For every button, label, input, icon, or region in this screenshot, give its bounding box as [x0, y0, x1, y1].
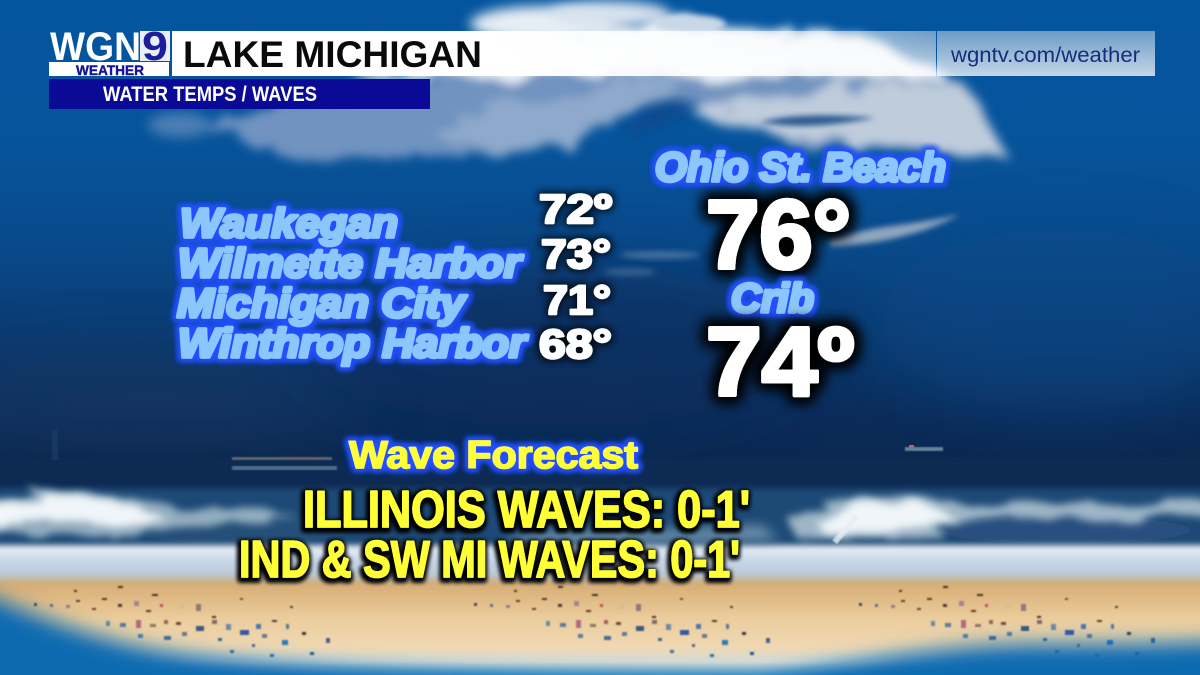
specks — [34, 586, 330, 657]
foam — [0, 545, 1200, 581]
wave forecast: Indiana and SW Michigan: IND & SW MI WAVES: 0-1' — [239, 531, 740, 589]
city names — [177, 200, 528, 366]
spray right — [790, 494, 1200, 543]
blue vignette — [0, 588, 1200, 675]
heading: Crib: Crib — [731, 275, 814, 321]
heading: Wave Forecast: Wave Forecast — [349, 434, 638, 477]
header: website: wgntv.com/weather — [950, 44, 1140, 67]
city temperatures: 73° — [541, 231, 611, 277]
header: logo: 9 — [142, 23, 168, 69]
wave water — [0, 488, 1200, 548]
big temperature: Ohio St. Beach: 76° — [706, 180, 851, 289]
city temperatures: 71° — [543, 277, 611, 323]
big temperature: Crib: 74º — [706, 307, 854, 416]
spray left — [0, 490, 300, 537]
city temperatures: 72º — [539, 186, 612, 232]
subtitle bar: WATER TEMPS / WAVES — [103, 83, 317, 106]
header: logo — [49, 23, 170, 78]
subtitle bar — [49, 79, 430, 109]
header: logo: WGN — [50, 25, 141, 69]
city temperatures — [539, 186, 612, 367]
header: logo: WEATHER — [76, 62, 144, 78]
beach scene — [0, 488, 1200, 675]
heading: Ohio St. Beach: Ohio St. Beach — [655, 144, 946, 190]
sand — [0, 574, 1200, 675]
city names: Wilmette Harbor — [178, 240, 523, 286]
city temperatures: 68° — [539, 321, 612, 367]
city names: Waukegan — [180, 200, 398, 246]
clouds — [148, 1, 1008, 276]
city names: Michigan City — [177, 280, 467, 326]
header: website — [937, 31, 1155, 76]
city names: Winthrop Harbor — [178, 320, 528, 366]
horizon dark band — [0, 458, 1200, 498]
wave forecast: Illinois: ILLINOIS WAVES: 0-1' — [303, 481, 750, 539]
header: title bar: LAKE MICHIGAN — [183, 33, 482, 75]
spray centre — [500, 525, 780, 545]
header: title bar — [172, 31, 936, 76]
